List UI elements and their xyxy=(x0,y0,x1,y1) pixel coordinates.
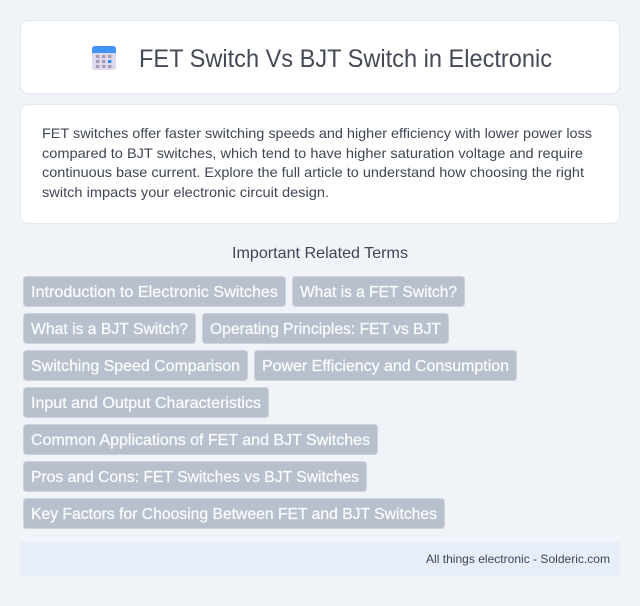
intro text panel xyxy=(20,104,620,224)
title: FET Switch Vs BJT Switch in Electronic xyxy=(139,45,552,73)
tag: what is BJT xyxy=(24,314,196,344)
tag: what is FET xyxy=(292,276,464,306)
tag: what is FET: What is a FET Switch? xyxy=(300,284,457,301)
related terms tag list xyxy=(24,276,516,528)
tag: power efficiency: Power Efficiency and Consumption xyxy=(262,358,509,375)
tag: applications: Common Applications of FET and BJT Switches xyxy=(31,432,370,449)
tag: introduction: Introduction to Electronic Switches xyxy=(31,284,278,301)
tag: introduction xyxy=(24,276,286,306)
section heading: Important Related Terms xyxy=(232,245,408,262)
footer credit: All things electronic - Solderic.com xyxy=(426,552,610,566)
intro paragraph: FET switches offer faster switching speeds and higher efficiency with lower power loss xyxy=(42,125,592,141)
tag: pros and cons xyxy=(24,462,366,492)
tag: operating principles xyxy=(202,314,448,344)
intro paragraph xyxy=(42,125,592,200)
tag: operating principles: Operating Principles: FET vs BJT xyxy=(210,321,441,338)
header panel xyxy=(20,20,620,94)
tag: key factors xyxy=(24,498,444,528)
tag: switching speed: Switching Speed Comparison xyxy=(31,358,240,375)
icon: calendar xyxy=(92,46,116,70)
tag: key factors: Key Factors for Choosing Between FET and BJT Switches xyxy=(31,506,437,523)
tag: pros and cons: Pros and Cons: FET Switches vs BJT Switches xyxy=(31,469,359,486)
tag: applications xyxy=(24,424,378,454)
intro paragraph: continuous base current. Explore the full article to understand how choosing the right xyxy=(42,164,584,180)
intro paragraph: switch impacts your electronic circuit design. xyxy=(42,184,329,200)
tag: switching speed xyxy=(24,350,248,380)
tag: input output: Input and Output Characteristics xyxy=(31,395,261,412)
footer band xyxy=(20,542,620,576)
tag: input output xyxy=(24,388,268,418)
tag: power efficiency xyxy=(254,350,516,380)
intro paragraph: compared to BJT switches, which tend to have higher saturation voltage and require xyxy=(42,145,583,161)
tag: what is BJT: What is a BJT Switch? xyxy=(31,321,188,338)
